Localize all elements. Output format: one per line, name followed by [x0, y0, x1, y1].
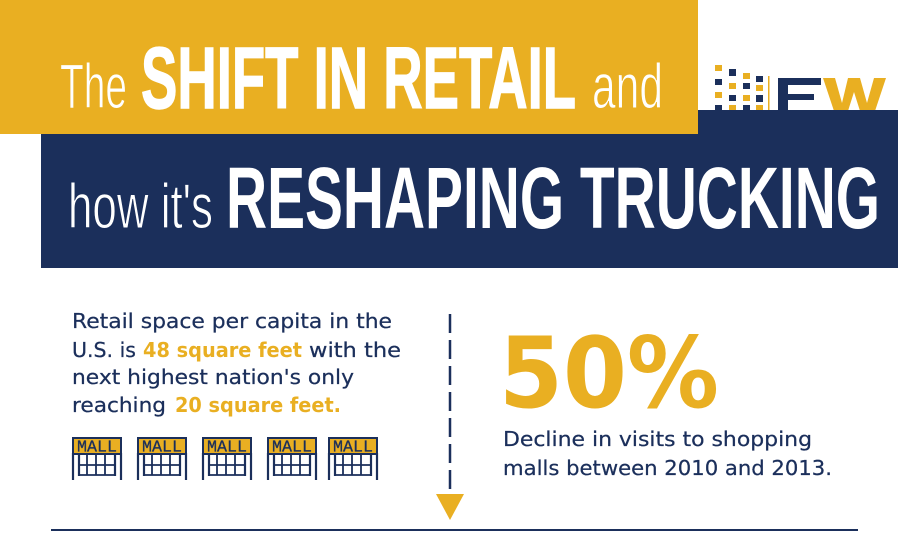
- icon: mall 1: [73, 438, 121, 480]
- icon: mall 4: MALL: [272, 438, 312, 458]
- logo: FW: [715, 65, 886, 111]
- text block: retail space per capita: next highest nation's only: [72, 365, 354, 389]
- icon: mall 4: [268, 438, 316, 480]
- arrow: dashed down arrow: [436, 314, 464, 520]
- text block: retail space per capita: with the: [309, 338, 401, 362]
- title line 1: [60, 30, 663, 127]
- icon: mall 3: [203, 438, 251, 480]
- icon: mall 3: MALL: [207, 438, 247, 458]
- text block: retail space per capita: Retail space per capita in the: [72, 309, 392, 333]
- text block: decline in visits: malls between 2010 and 2013.: [503, 456, 832, 480]
- text block: decline in visits: [503, 427, 832, 480]
- icon: mall 5: [329, 438, 377, 480]
- text block: retail space per capita: [72, 309, 401, 417]
- panel: navy title band: [41, 110, 898, 268]
- text block: decline in visits: Decline in visits to shopping: [503, 427, 812, 451]
- stat: 50%: 50%: [499, 317, 719, 431]
- title line 1: The: [60, 52, 127, 122]
- text block: retail space per capita: 20 square feet.: [175, 393, 341, 417]
- title line 1: and: [592, 52, 663, 122]
- title line 1: SHIFT IN RETAIL: [141, 30, 576, 127]
- panel: gold title band: [0, 0, 698, 134]
- title line 2: how it's: [68, 172, 213, 242]
- text block: retail space per capita: U.S. is: [72, 338, 136, 362]
- text block: retail space per capita: 48 square feet: [143, 338, 302, 362]
- text block: retail space per capita: reaching: [72, 393, 166, 417]
- icon: mall 2: MALL: [142, 438, 182, 458]
- icon: mall 5: MALL: [333, 438, 373, 458]
- icon: mall 2: [138, 438, 186, 480]
- icon: mall 1: MALL: [77, 438, 117, 458]
